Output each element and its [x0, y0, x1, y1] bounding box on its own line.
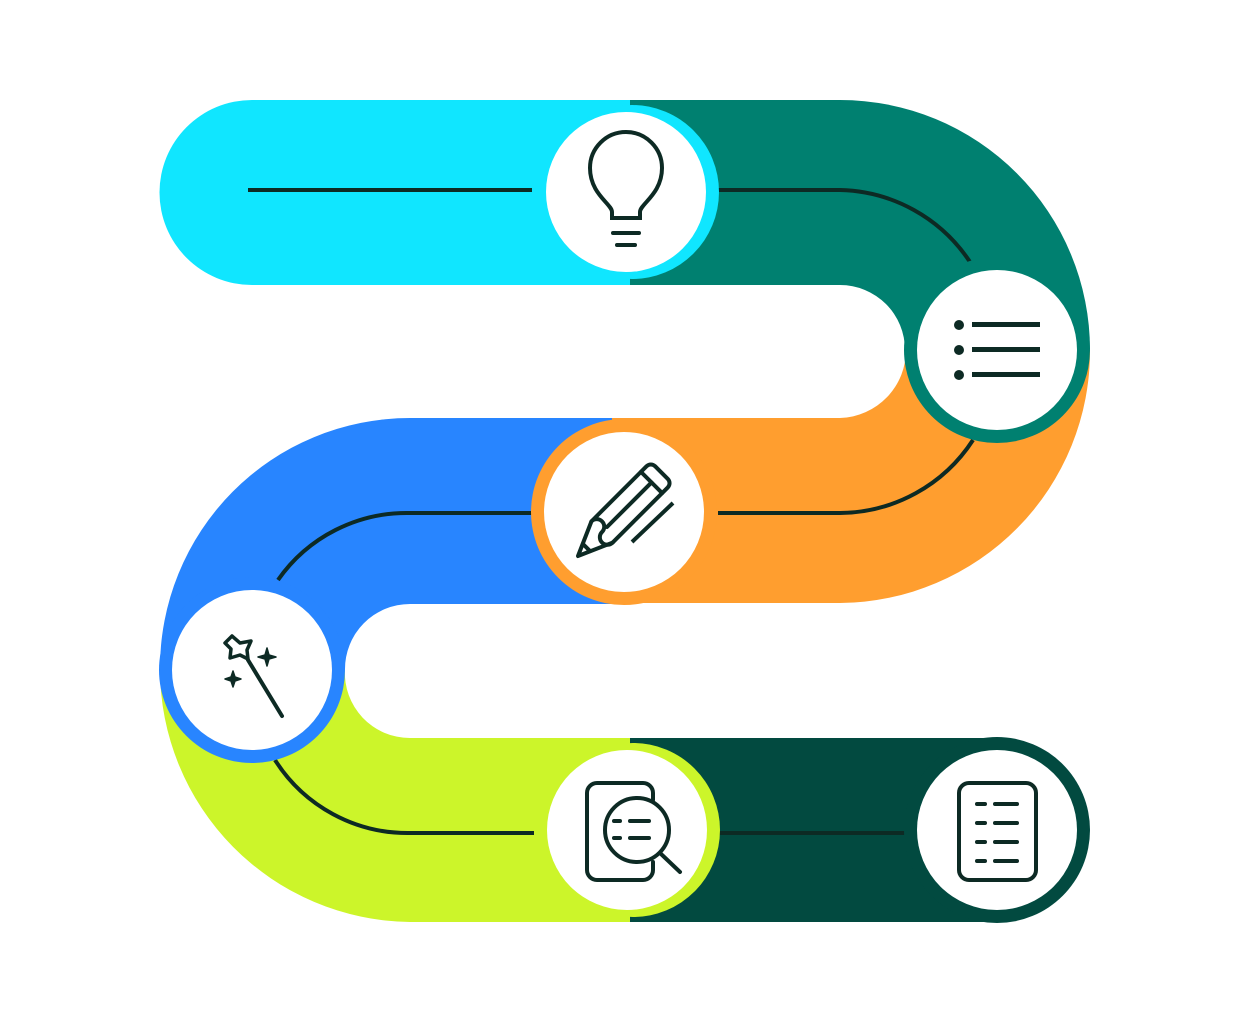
road segment: lime bend: [160, 669, 632, 922]
road segment: teal bend: [630, 100, 1090, 350]
node: idea (lightbulb): [545, 105, 719, 279]
node: document: [904, 737, 1090, 923]
node: pencil: [531, 419, 717, 605]
road segment: dark green: [630, 738, 1089, 922]
node: list: [904, 257, 1090, 443]
road segment: blue bend: [160, 418, 612, 670]
icon: document: [959, 783, 1036, 880]
node: magic wand: [159, 577, 345, 763]
center line: [248, 190, 973, 833]
icon: search document: [587, 783, 680, 880]
road segment: orange bend: [608, 349, 1090, 603]
icon: list: [954, 320, 1040, 380]
node: search document: [546, 743, 720, 917]
icon: pencil: [567, 462, 672, 567]
road segment: cyan: [160, 100, 632, 285]
icon: magic wand: [225, 636, 282, 716]
icon: lightbulb: [590, 132, 662, 245]
